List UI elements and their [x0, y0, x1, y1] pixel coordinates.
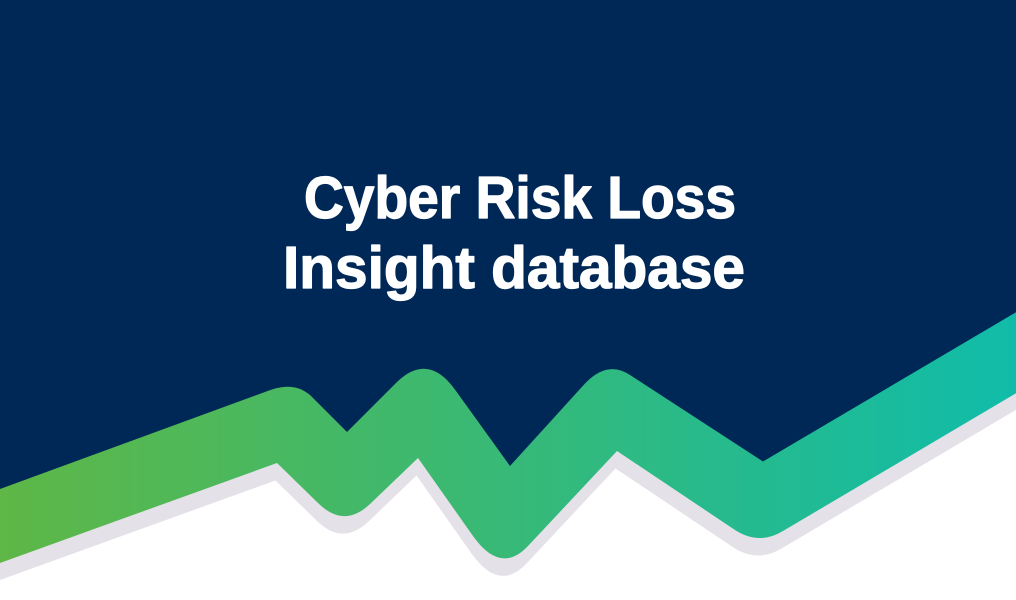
line chart band: green gradient — [0, 304, 1016, 567]
title line 1: Cyber Risk Loss — [304, 165, 736, 231]
line chart band shadow — [0, 322, 1016, 584]
title — [283, 165, 745, 301]
title line 2: Insight database — [283, 235, 745, 301]
